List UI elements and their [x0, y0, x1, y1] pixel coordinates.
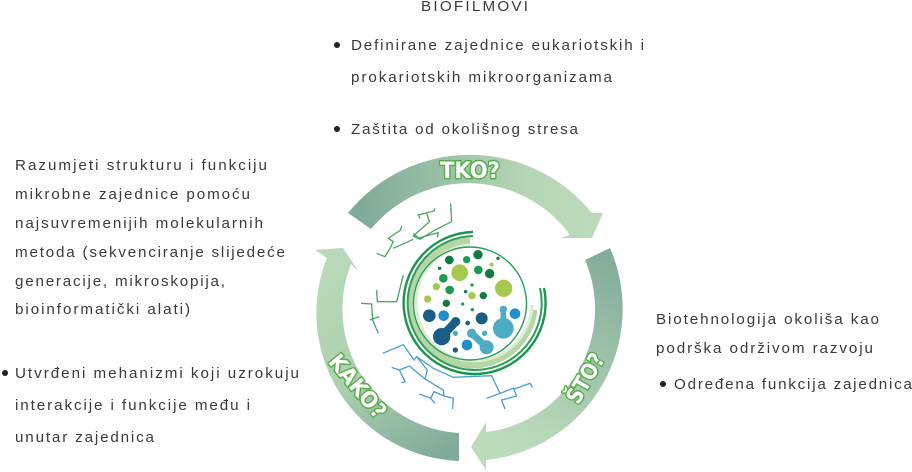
text block: kako intro: generacije, mikroskopija, [15, 273, 225, 290]
bullet text: definirane zajednice: Definirane zajednice eukariotskih i [351, 37, 644, 54]
text block: sto: Biotehnologija okoliša kao [656, 311, 879, 328]
tree: green upper [377, 203, 452, 257]
rings around petri dish [404, 232, 546, 374]
blue dots [438, 308, 520, 350]
bullet [334, 126, 340, 132]
text block: kako intro: najsuvremenijih molekularnih [15, 215, 263, 232]
dark green dots [438, 250, 500, 307]
text block: kako bullet [2, 365, 299, 446]
petri dish dots [423, 250, 520, 354]
text block: kako intro: Razumjeti strukturu i funkciju [15, 157, 267, 174]
label: sto: ŠTO? [561, 349, 611, 408]
tree: blue lower [383, 345, 533, 409]
text block: kako intro: bioinformatički alati) [15, 301, 190, 318]
text block: kako bullet: interakcije i funkcije među i [15, 397, 250, 414]
label: kako: KAKO? [323, 350, 391, 424]
lime dots [424, 263, 512, 303]
text block: kako intro [15, 157, 285, 318]
bullet text: zastita: Zaštita od okolišnog stresa [351, 121, 579, 138]
arrow: tko [348, 155, 603, 238]
text block: kako bullet: Utvrđeni mehanizmi koji uzrokuju [15, 365, 299, 382]
bullet text continuation: prokariotskih mikroorganizama [351, 69, 613, 86]
bullet [334, 42, 340, 48]
teal dots and blobs [453, 306, 514, 354]
text block: kako intro: metoda (sekvenciranje slijedeće [15, 244, 285, 261]
text block: tko [334, 37, 644, 138]
navy dots and blob [423, 309, 488, 353]
mid green dots [439, 256, 483, 311]
text block: kako intro: mikrobne zajednice pomoću [15, 186, 250, 203]
text block: kako bullet: unutar zajednica [15, 429, 155, 446]
text block: sto: Određena funkcija zajednica [674, 376, 912, 393]
arrow: kako [315, 248, 459, 461]
arrow: sto [471, 248, 623, 470]
label: tko: TKO? [440, 159, 500, 184]
tree: green left [361, 275, 403, 333]
text block: sto: podrška održivom razvoju [656, 340, 873, 357]
text block: sto [656, 311, 912, 393]
